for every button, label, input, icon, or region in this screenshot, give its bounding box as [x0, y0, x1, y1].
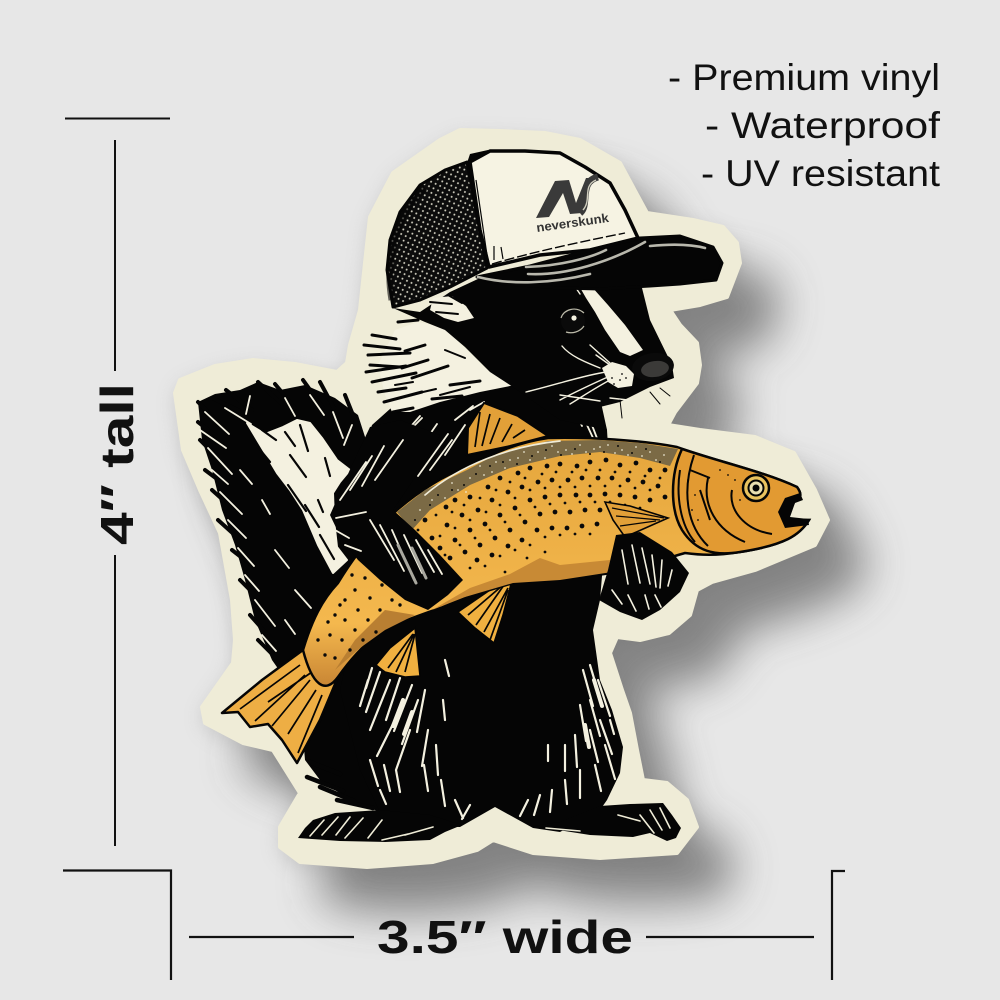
- head white stripe: [578, 284, 643, 356]
- features list: [668, 57, 941, 194]
- upper body fur highlights: [390, 402, 600, 476]
- gill flecks: [688, 470, 740, 520]
- fish body: [303, 438, 809, 686]
- fish eye: [743, 475, 769, 501]
- height dimension lines: [65, 118, 170, 846]
- cap front panel: [470, 151, 638, 267]
- sticker die-cut backing: [175, 130, 828, 867]
- cap logo: [535, 177, 610, 235]
- trout: [222, 403, 809, 763]
- cap button: [466, 150, 492, 166]
- sticker drop shadow: [175, 136, 868, 913]
- features list: - Waterproof: [705, 105, 941, 146]
- skunk feet: [298, 762, 681, 842]
- hind leg fur spikes: [307, 762, 373, 808]
- skunk neck white fur: [364, 320, 515, 412]
- features list: - UV resistant: [701, 153, 941, 194]
- nose: [630, 350, 676, 384]
- fish mouth: [778, 493, 809, 528]
- skunk tail: [198, 380, 400, 812]
- features list: - Premium vinyl: [668, 57, 940, 98]
- tail white stripe: [247, 420, 350, 573]
- fish belly shade: [432, 558, 612, 610]
- fish spots large: [425, 460, 665, 560]
- tail spots: [318, 555, 405, 658]
- cap brim: [477, 236, 722, 289]
- skunk body: [340, 385, 623, 832]
- whiskers: [526, 282, 628, 404]
- pelvic fin: [376, 628, 420, 677]
- width dimension label: 3.5″ wide: [377, 911, 633, 963]
- skunk left arm gripping fish: [330, 420, 463, 610]
- back speckle: [420, 441, 664, 510]
- gill lines: [679, 455, 772, 546]
- body fur highlights left: [360, 660, 470, 819]
- skunk right paw under fish: [599, 532, 689, 620]
- dorsal fin: [467, 403, 548, 455]
- fish back speckled band: [397, 440, 678, 530]
- eye: [561, 309, 585, 333]
- cap panel seam: [476, 180, 503, 262]
- cap logo: neverskunk: [535, 211, 610, 235]
- height dimension label: 4″ tall: [91, 383, 143, 545]
- body fur highlights right: [520, 665, 615, 816]
- fish gill cover and head: [673, 449, 809, 553]
- width dimension lines: [63, 870, 845, 980]
- cap mesh back: [387, 162, 487, 307]
- pectoral fin: [605, 502, 668, 537]
- tail fur strokes: [200, 395, 352, 651]
- tail fin: [222, 650, 338, 763]
- tail outer fur spikes: [198, 380, 357, 658]
- muzzle: [602, 362, 634, 388]
- skunk head: [393, 278, 676, 430]
- tail stripe black flecks: [252, 425, 334, 559]
- fish spots small: [418, 470, 660, 572]
- fin rays: [240, 412, 525, 753]
- head white patch: [430, 296, 474, 322]
- brim highlights: [478, 242, 705, 282]
- cap stitch line: [492, 233, 625, 264]
- trucker cap: [387, 150, 722, 307]
- anal fin: [458, 580, 512, 643]
